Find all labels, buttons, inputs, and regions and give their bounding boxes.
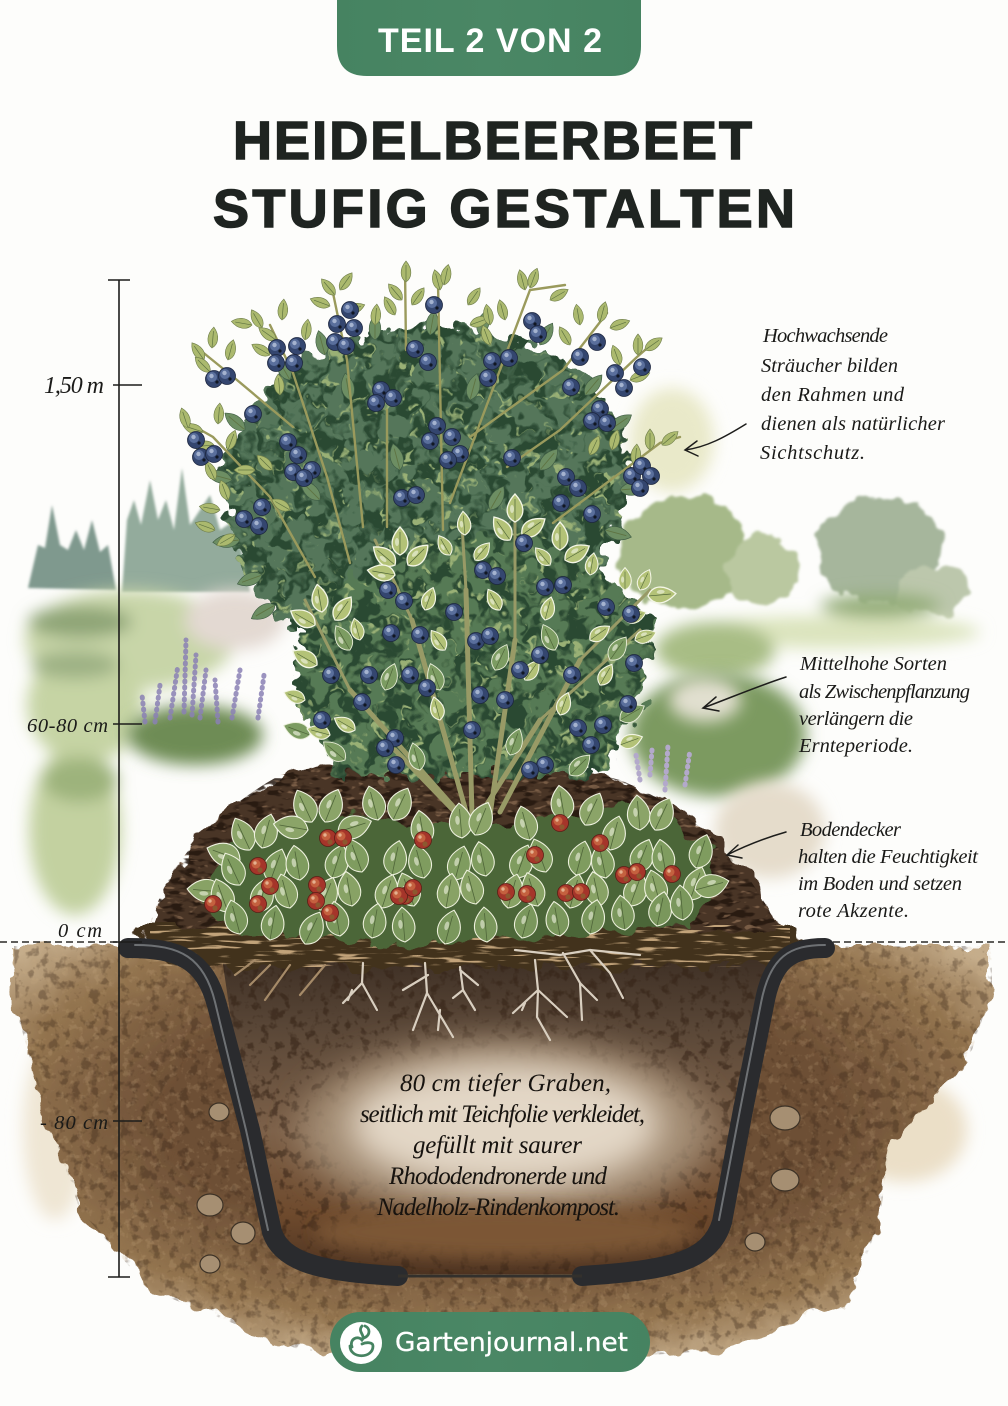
- foliage mass: [290, 520, 660, 790]
- mid-green fringe leaves: [205, 309, 648, 624]
- trench description: [360, 1070, 645, 1221]
- pale leaves: [177, 261, 681, 550]
- annotation: tall shrubs: [760, 325, 946, 464]
- back blueberry shrub: [177, 261, 681, 650]
- trench description: seitlich mit Teichfolie verkleidet,: [360, 1101, 645, 1128]
- right lower shrub with flowers: [630, 673, 825, 878]
- arrow: medium varieties: [703, 677, 786, 711]
- trench description: gefüllt mit saurer: [413, 1132, 582, 1159]
- branches: [183, 267, 680, 577]
- annotation: medium varieties: verlängern die: [799, 708, 913, 730]
- pond liner bottom: [398, 1274, 582, 1278]
- mid leaf row: [186, 863, 732, 916]
- top banner: TEIL 2 VON 2: [378, 22, 602, 60]
- title: [213, 111, 795, 239]
- title: HEIDELBEERBEET: [233, 111, 752, 171]
- annotation: tall shrubs: Hochwachsende: [762, 325, 888, 347]
- dark base: [195, 800, 722, 945]
- annotation: groundcover: im Boden und setzen: [798, 873, 962, 895]
- upper leaf row: [215, 831, 718, 890]
- darker inner leaves: [281, 621, 648, 781]
- right meadow: [655, 594, 980, 678]
- icon: sprout in bowl: [340, 1322, 382, 1364]
- pond liner right: [582, 945, 825, 1276]
- dashed ground line: [0, 941, 1008, 943]
- footer badge: Gartenjournal.net: [395, 1328, 628, 1358]
- right trees: [618, 496, 966, 614]
- trench description: 80 cm tiefer Graben,: [400, 1070, 611, 1097]
- pond liner left: [128, 945, 398, 1276]
- lavender and left shrub: [127, 640, 264, 765]
- annotation: medium varieties: Mittelhohe Sorten: [799, 653, 947, 675]
- trench description: Nadelholz-Rindenkompost.: [376, 1194, 620, 1221]
- height scale: 60-80 cm: [27, 715, 108, 737]
- top sprays: [203, 783, 680, 871]
- annotation: groundcover: rote Akzente.: [798, 900, 909, 922]
- litter and root band: [135, 925, 805, 968]
- height scale: 0 cm: [58, 920, 102, 942]
- left conifer forest: [28, 468, 250, 592]
- bottom leaf row: [220, 884, 694, 949]
- berries: [314, 534, 642, 778]
- background landscape: [25, 388, 980, 915]
- stems: [305, 505, 650, 815]
- annotation: groundcover: halten die Feuchtigkeit: [798, 846, 979, 868]
- annotation: medium varieties: [798, 653, 970, 757]
- groundcover lingonberries: [186, 783, 732, 949]
- top banner: [337, 0, 641, 76]
- trench fill: [222, 959, 766, 1274]
- berries: [188, 296, 660, 534]
- roots: [235, 950, 640, 1040]
- annotation: tall shrubs: Sichtschutz.: [760, 442, 865, 464]
- annotation: tall shrubs: Sträucher bilden: [761, 355, 898, 377]
- trench description: Rhododendronerde und: [388, 1163, 608, 1190]
- height scale: - 80 cm: [40, 1112, 108, 1134]
- stones: [197, 1103, 800, 1273]
- height scale: 1,50 m: [44, 373, 104, 399]
- red berries: [204, 814, 680, 922]
- pale soil wash: [23, 1040, 967, 1220]
- mulch mound: [146, 764, 782, 938]
- annotation: tall shrubs: dienen als natürlicher: [761, 413, 946, 435]
- height scale: [27, 280, 142, 1277]
- title: STUFIG GESTALTEN: [213, 179, 795, 239]
- annotation: medium varieties: Ernteperiode.: [798, 735, 913, 757]
- soil speckle: [0, 940, 1008, 1370]
- annotation: tall shrubs: den Rahmen und: [761, 384, 905, 406]
- foliage mass: [210, 320, 632, 632]
- footer badge: [330, 1312, 650, 1372]
- light leaves: [282, 494, 677, 751]
- annotation: groundcover: Bodendecker: [800, 819, 902, 841]
- arrow: groundcover: [727, 832, 786, 858]
- outer soil: [14, 946, 992, 1366]
- wash behind bush right: [630, 388, 714, 492]
- front blueberry shrub: [281, 494, 677, 815]
- left meadow: [25, 590, 285, 915]
- arrow: tall shrubs: [685, 424, 746, 456]
- soil cross-section: [0, 925, 1008, 1370]
- annotation: medium varieties: als Zwischenpflanzung: [799, 681, 970, 703]
- annotation: groundcover: [798, 819, 979, 922]
